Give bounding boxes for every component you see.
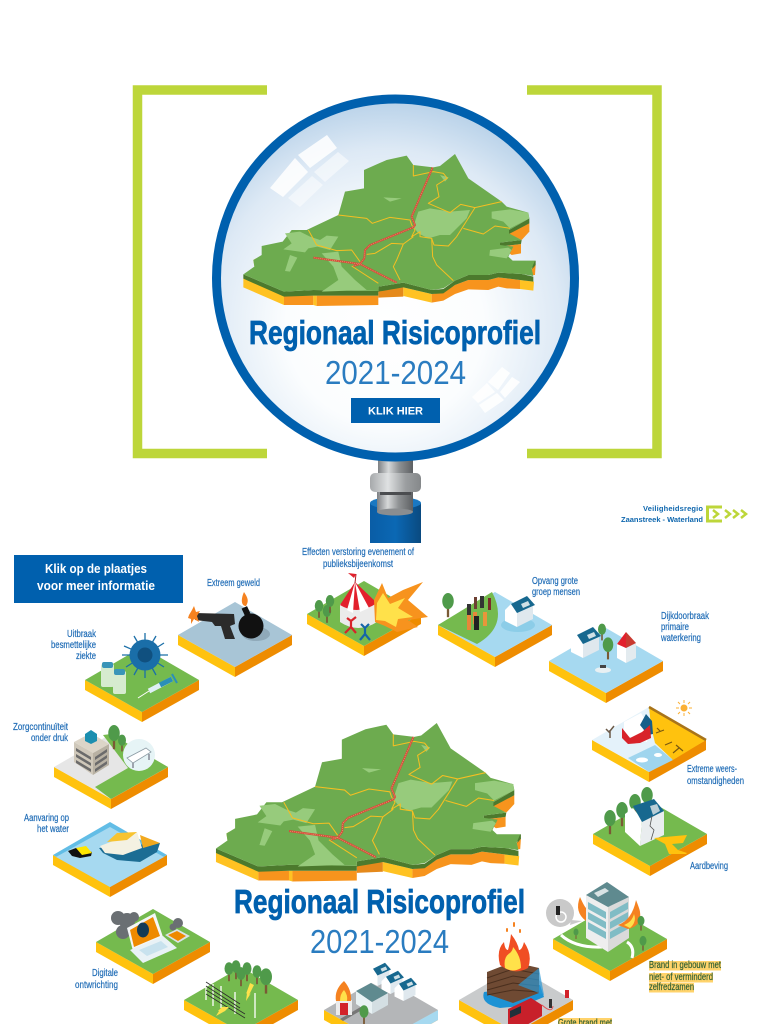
tile: grote brand [459,922,573,1024]
title upper: Regionaal Risicoprofiel [249,314,541,351]
tile: industrie en woningen [324,963,438,1024]
title lower: Regionaal Risicoprofiel [234,883,525,920]
label: zorgcontinuiteit [13,722,69,744]
tile: opvang grote groep mensen [438,592,552,667]
label: uitbraak: ziekte [76,651,96,662]
label: zorgcontinuiteit: onder druk [31,733,69,744]
tile: uitbraak besmettelijke ziekte [85,633,199,722]
label: dijkdoorbraak: Dijkdoorbraak [661,611,710,622]
tile: effecten verstoring evenement [307,573,428,656]
label: effecten: Effecten verstoring evenement of [302,547,414,558]
instruction box [14,555,183,603]
magnifier lens [216,99,574,457]
label: aanvaring: Aanvaring op [24,813,69,824]
label: dijkdoorbraak: waterkering [660,633,701,644]
label: uitbraak: Uitbraak [67,629,97,640]
label: brand in gebouw [649,960,721,993]
magnifier handle [370,458,421,543]
green frame brackets [138,90,657,454]
tile: zorgcontinuiteit [54,725,168,809]
map: upper [243,154,536,306]
button: klik hier [351,398,440,423]
label: extreme weers: omstandigheden [687,776,744,787]
tile: extreme weersomstandigheden [592,700,706,782]
label: effecten: publieksbijeenkomst [323,559,393,570]
label: aanvaring: het water [37,824,70,835]
tile: aardbeving [593,787,707,876]
label: opvang [532,576,580,598]
logo veiligheidsregio [621,504,746,524]
label: uitbraak [51,629,97,662]
instruction box: Klik op de plaatjes [45,561,147,576]
label: aardbeving: Aardbeving [690,861,728,872]
label: dijkdoorbraak: primaire [661,622,689,633]
instruction box: voor meer informatie [37,578,155,593]
label: brand in gebouw: Brand in gebouw met [649,960,721,971]
label: zorgcontinuiteit: Zorgcontinuïteit [13,722,68,733]
label: digitale: ontwrichting [75,980,118,991]
label: brand in gebouw: niet- of verminderd [649,972,713,983]
label: dijkdoorbraak [660,611,710,644]
tile: uitval energie [184,960,298,1024]
logo veiligheidsregio: Zaanstreek - Waterland [621,515,703,524]
label: opvang: groep mensen [532,587,580,598]
label: effecten [302,547,414,570]
logo veiligheidsregio: Veiligheidsregio [643,504,703,513]
label: extreme weers: Extreme weers- [687,764,737,775]
lens glare bottom right [472,367,520,413]
tile: extreem geweld [178,592,292,677]
years lower: 2021-2024 [310,923,449,960]
label: aanvaring [24,813,70,835]
map: lower [216,723,521,882]
button: klik hier: KLIK HIER [368,406,423,418]
lens glare top left [270,135,349,207]
label: opvang: Opvang grote [532,576,578,587]
tile: digitale ontwrichting [96,909,210,984]
label: uitbraak: besmettelijke [51,640,96,651]
label: brand in gebouw: zelfredzamen [649,982,694,993]
tile: aanvaring op het water [53,822,167,897]
label: digitale: Digitale [92,968,118,979]
label: digitale [75,968,118,991]
tile: brand in gebouw [546,882,667,981]
label: extreme weers [687,764,744,787]
years upper: 2021-2024 [325,354,466,391]
label: extreem geweld: Extreem geweld [207,578,260,589]
tile: dijkdoorbraak primaire waterkering [549,624,663,703]
